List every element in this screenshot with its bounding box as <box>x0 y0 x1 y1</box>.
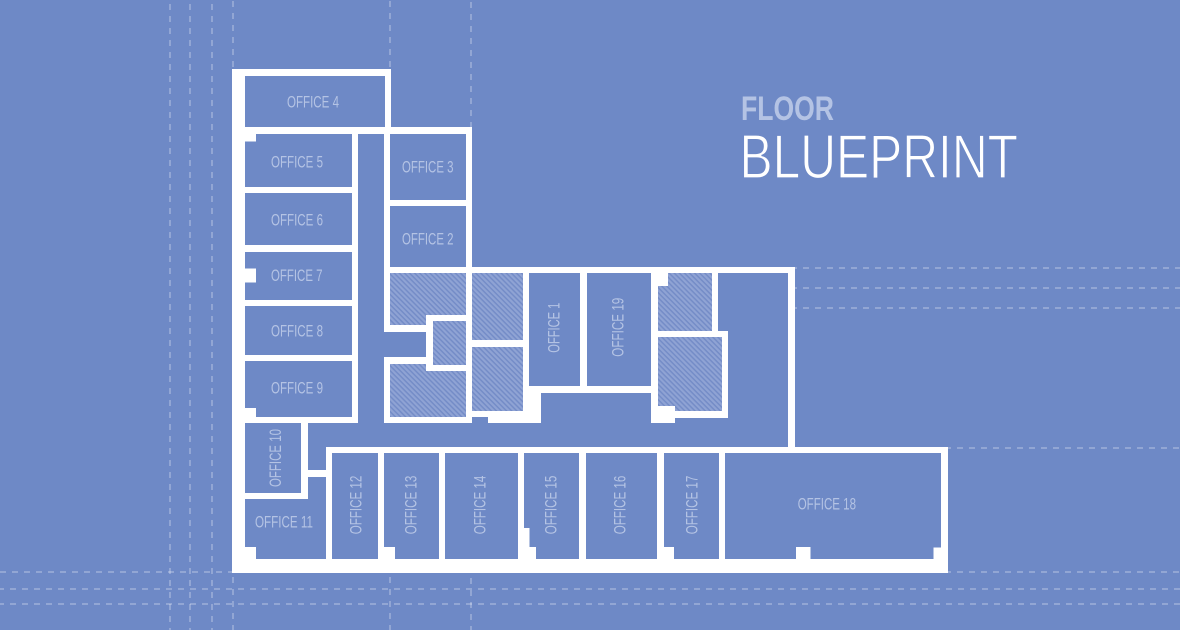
office 17 <box>664 453 719 559</box>
office 9: OFFICE 9 <box>271 380 323 398</box>
title <box>740 90 1018 192</box>
hatched room: small <box>433 321 466 365</box>
office 10: OFFICE 10 <box>267 429 285 487</box>
office 3: OFFICE 3 <box>402 158 454 176</box>
office 4 <box>245 76 385 127</box>
office 19: OFFICE 19 <box>610 298 628 357</box>
office 7 <box>245 252 352 300</box>
office 4: OFFICE 4 <box>287 93 339 111</box>
office 18: OFFICE 18 <box>798 495 856 513</box>
office 6: OFFICE 6 <box>271 212 323 230</box>
hatched room: right bottom <box>658 337 722 411</box>
office 8: OFFICE 8 <box>271 322 323 340</box>
office 12 <box>332 453 378 559</box>
office 2 <box>390 206 466 267</box>
office 15 <box>524 453 579 559</box>
office 6 <box>245 193 352 245</box>
office 14 <box>445 453 518 559</box>
office 5: OFFICE 5 <box>271 153 323 171</box>
office 13 <box>384 453 439 559</box>
office 2: OFFICE 2 <box>402 230 454 248</box>
office 1 <box>529 273 580 386</box>
hatched room: right top <box>658 273 712 331</box>
office 13: OFFICE 13 <box>403 476 421 534</box>
office 12: OFFICE 12 <box>348 476 366 534</box>
office 1: OFFICE 1 <box>546 303 564 353</box>
floor plan <box>232 69 948 573</box>
hatched room: upper left <box>390 273 466 325</box>
office 16: OFFICE 16 <box>612 476 630 534</box>
office 18 <box>725 453 941 559</box>
office 17: OFFICE 17 <box>684 476 702 534</box>
office 11 <box>245 477 326 559</box>
office 5 <box>245 134 352 187</box>
hatched room: centre bottom <box>472 347 523 411</box>
office 10 <box>245 423 301 493</box>
office 9 <box>245 361 352 417</box>
office 16 <box>586 453 657 559</box>
title: floor: FLOOR <box>741 90 834 128</box>
corridor <box>308 134 788 470</box>
office 7: OFFICE 7 <box>271 267 322 285</box>
hatched room: centre top <box>472 273 523 340</box>
office 11: OFFICE 11 <box>255 514 313 532</box>
hatched room: lower left <box>390 364 466 417</box>
office 8 <box>245 306 352 355</box>
office 15: OFFICE 15 <box>542 476 560 534</box>
outer walls <box>232 69 948 573</box>
office 3 <box>390 134 466 200</box>
office 19 <box>587 273 651 386</box>
title: blueprint: BLUEPRINT <box>740 122 1018 192</box>
office 14: OFFICE 14 <box>472 476 490 534</box>
